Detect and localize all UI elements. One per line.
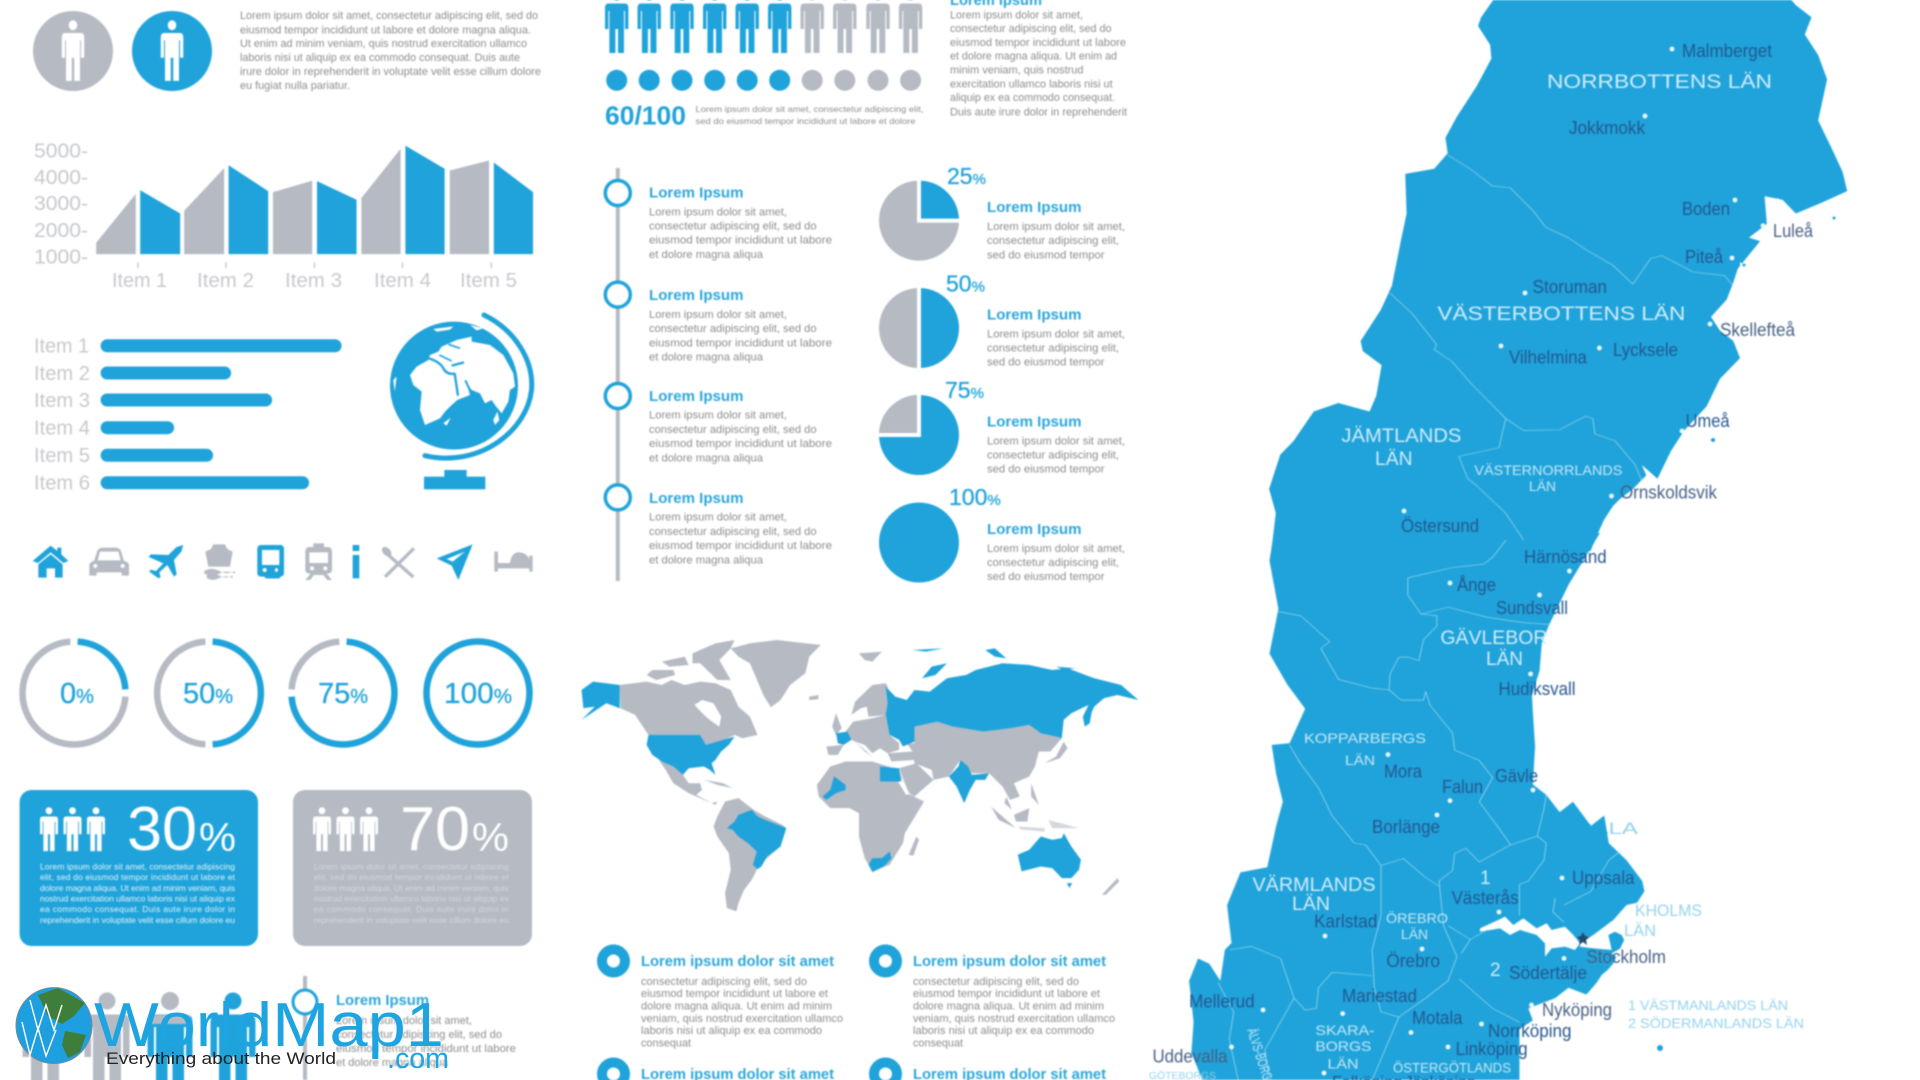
city names: Karlstad xyxy=(1314,912,1377,932)
chart: progress ring 75%: 75% xyxy=(318,678,368,710)
timeline entry 2: consectetur adipiscing elit, sed do xyxy=(649,323,817,335)
chart: pie 100% with text: 100% xyxy=(949,484,1001,510)
legend item: second column row one: dolore magna aliqua. Ut enim ad minim xyxy=(913,1000,1104,1012)
city names: Piteå xyxy=(1685,247,1724,267)
map: Sweden: ÖREBRO xyxy=(1386,909,1448,926)
city names xyxy=(1189,41,1772,1080)
panel: 30 percent xyxy=(20,790,258,946)
chart: horizontal bars: Item 6 xyxy=(34,472,90,494)
chart: pie 50% with text: Lorem Ipsum xyxy=(987,306,1082,324)
county labels: LÄN xyxy=(1375,449,1412,470)
text block: top right column: consectetur adipiscing elit, sed do xyxy=(950,23,1112,35)
timeline: bottom-left entry xyxy=(293,976,516,1080)
legend item: second column row two xyxy=(874,1062,1106,1080)
county labels: VÄSTERBOTTENS LÄN xyxy=(1437,304,1685,325)
city names crossing the coast: Ornskoldsvik xyxy=(1620,482,1718,502)
city markers xyxy=(1229,47,1765,1075)
watermark tagline: Everything about the World xyxy=(106,1050,336,1068)
text block: intro paragraph: Ut enim ad minim veniam, quis nostrud exercitation ullamco xyxy=(240,38,527,50)
chart: progress ring 100%: 100% xyxy=(444,678,512,710)
pictogram: ten people, six highlighted xyxy=(605,0,922,91)
chart: horizontal bars: Item 5 xyxy=(34,445,90,467)
map: Sweden xyxy=(1149,0,1847,1080)
chart: progress ring 0% xyxy=(23,642,125,744)
chart: pie 25% with text: sed do eiusmod tempor xyxy=(987,250,1105,262)
icon: bus xyxy=(257,545,282,578)
legend item: first column row one: consequat xyxy=(641,1038,691,1050)
stat: 60/100: 60/100 xyxy=(605,100,686,130)
timeline entry 3: Lorem Ipsum xyxy=(649,388,744,405)
city names: Borlänge xyxy=(1372,817,1440,837)
timeline entry 1: consectetur adipiscing elit, sed do xyxy=(649,220,817,232)
watermark domain: .com xyxy=(387,1043,449,1075)
chart y axis labels: 4000- xyxy=(34,167,88,189)
map legend: 1 VÄSTMANLANDS LÄN xyxy=(1628,997,1788,1013)
county labels: 2 xyxy=(1490,960,1501,981)
chart y axis labels xyxy=(34,140,88,268)
county labels: LÄN xyxy=(1486,649,1523,670)
chart: horizontal bars: Item 4 xyxy=(34,418,90,440)
chart x axis labels xyxy=(112,270,517,292)
city names: Härnösand xyxy=(1524,547,1607,567)
chart: pie 75% with text: 75% xyxy=(945,377,984,403)
map: world xyxy=(581,640,1138,911)
panel text: reprehenderit in voluptate velit esse cillum dolore eu xyxy=(314,915,509,925)
city names: Mariestad xyxy=(1342,986,1417,1006)
chart: pie 25% with text: Lorem Ipsum xyxy=(987,199,1082,216)
county labels: GÄVLEBOR xyxy=(1440,628,1547,649)
chart: pie 100% with text: consectetur adipiscing elit, xyxy=(987,557,1119,569)
legend item: second column row one: laboris nisi ut aliquip ex ea commodo xyxy=(913,1025,1094,1037)
icon: blue person badge xyxy=(132,11,212,91)
chart: progress ring 50%: 50% xyxy=(183,678,233,710)
chart: horizontal bars: Item 2 xyxy=(34,363,90,385)
chart: pie 100% with text: sed do eiusmod tempor xyxy=(987,571,1105,583)
panel: 70 percent xyxy=(293,790,532,946)
icon: house xyxy=(33,546,68,578)
panel text: elit, sed do eiusmod tempor incididunt ut labore et xyxy=(314,872,509,882)
city names: Jokkmokk xyxy=(1569,118,1646,138)
legend item: second column row one: eiusmod tempor incididunt ut labore et xyxy=(913,988,1100,1000)
panel text: Lorem ipsum dolor sit amet, consectetur adipiscing xyxy=(314,862,509,872)
chart x axis labels: Item 3 xyxy=(285,270,342,292)
legend item: second column row one: consequat xyxy=(913,1038,963,1050)
city names: Södertälje xyxy=(1509,963,1587,983)
legend item: second column row one: veniam, quis nostrud exercitation ullamco xyxy=(913,1013,1115,1025)
city names: Linköping xyxy=(1456,1039,1528,1059)
map: Sweden: SKARA- xyxy=(1315,1022,1375,1038)
city names crossing the coast: Luleå xyxy=(1773,221,1814,241)
icon: airplane xyxy=(149,545,183,578)
timeline entry 1: et dolore magna aliqua xyxy=(649,249,764,261)
timeline entry 4: eiusmod tempor incididunt ut labore xyxy=(649,540,832,552)
pictogram: bottom-left people xyxy=(22,992,256,1080)
timeline: four entries xyxy=(605,168,832,581)
chart: pie 25% with text: 25% xyxy=(947,163,986,189)
chart x axis labels: Item 4 xyxy=(374,270,431,292)
chart: progress ring 50% xyxy=(157,642,261,744)
text block: top right column xyxy=(950,0,1127,118)
timeline entry 1 xyxy=(605,180,832,261)
city names crossing the coast: Stockholm xyxy=(1586,947,1666,967)
timeline entry 3 xyxy=(605,384,832,464)
map landmass xyxy=(1189,0,1847,1080)
panel text: dolore magna aliqua. Ut enim ad minim veniam, quis xyxy=(40,883,235,893)
city names: Hudiksvall xyxy=(1498,679,1576,699)
chart: horizontal bars xyxy=(34,336,342,494)
panel: 70 percent: % xyxy=(472,816,509,860)
panel text: nostrud exercitation ullamco laboris nisi ut aliquip ex xyxy=(314,894,509,904)
chart bars xyxy=(96,146,533,268)
text block: top right column: eiusmod tempor incididunt ut labore xyxy=(950,37,1126,49)
text block: intro paragraph: Lorem ipsum dolor sit amet, consectetur adipiscing elit, sed do xyxy=(240,10,538,22)
watermark name: WorldMap1 xyxy=(94,991,444,1060)
timeline entry 4 xyxy=(605,485,832,566)
city names crossing the coast: Uddevalla xyxy=(1152,1047,1228,1067)
text block: top right column: Duis aute irure dolor in reprehenderit xyxy=(950,106,1127,118)
timeline entry 4: Lorem Ipsum xyxy=(649,490,744,507)
chart y axis labels: 1000- xyxy=(34,246,88,268)
timeline: bottom-left entry: et dolore magna aliqua xyxy=(336,1057,449,1069)
map: Sweden: LÄN xyxy=(1401,926,1428,942)
timeline entry 1: eiusmod tempor incididunt ut labore xyxy=(649,235,832,247)
text block: intro paragraph: eiusmod tempor incididunt ut labore et dolore magna aliqua. xyxy=(240,24,531,36)
chart: pie 100% with text: Lorem ipsum dolor sit amet, xyxy=(987,543,1125,555)
icon: cutlery xyxy=(381,546,414,577)
chart: horizontal bars: Item 3 xyxy=(34,390,90,412)
chart: pie 75% with text: Lorem Ipsum xyxy=(987,414,1082,430)
county labels: NORRBOTTENS LÄN xyxy=(1547,72,1772,93)
timeline entry 3: eiusmod tempor incididunt ut labore xyxy=(649,438,832,450)
map: Sweden: LÄN xyxy=(1529,478,1556,494)
panel text: ea commodo consequat. Duis aute irure dolor in xyxy=(40,904,235,914)
text block: top right column: Lorem ipsum dolor sit amet, xyxy=(950,10,1083,22)
city names: Ånge xyxy=(1457,575,1496,595)
timeline entry 4: consectetur adipiscing elit, sed do xyxy=(649,526,817,538)
panel text xyxy=(40,862,236,925)
map: Sweden: LÄN xyxy=(1345,752,1375,768)
chart: pie 50% with text: 50% xyxy=(946,270,985,296)
chart: horizontal bars: Item 1 xyxy=(34,336,89,358)
timeline entry 4: Lorem ipsum dolor sit amet, xyxy=(649,512,787,524)
panel text: ea commodo consequat. Duis aute irure dolor in xyxy=(314,904,509,914)
legend item: second column row one: consectetur adipiscing elit, sed do xyxy=(913,976,1079,988)
city names: Västerås xyxy=(1452,888,1519,908)
text block: top right column: et dolore magna aliqua. Ut enim ad xyxy=(950,50,1117,62)
text block: top right column: aliquip ex ea commodo consequat. xyxy=(950,92,1115,104)
icon: bus right side xyxy=(268,545,284,578)
icon: globe on stand xyxy=(390,315,532,489)
city names: Boden xyxy=(1682,199,1730,219)
legend item: first column row one: dolore magna aliqua. Ut enim ad minim xyxy=(641,1000,832,1012)
icon: gray person badge xyxy=(33,11,113,91)
timeline entry 1: Lorem Ipsum xyxy=(649,184,744,202)
city names crossing the coast: Skellefteå xyxy=(1720,320,1796,340)
city names: Umeå xyxy=(1686,411,1731,431)
panel text: Lorem ipsum dolor sit amet, consectetur adipiscing xyxy=(40,862,235,872)
city names: Motala xyxy=(1412,1008,1463,1028)
legend item: first column row one: consectetur adipiscing elit, sed do xyxy=(641,976,807,988)
legend item: first column row one xyxy=(602,950,843,1050)
chart y axis labels: 5000- xyxy=(34,140,88,162)
city names: Örebro xyxy=(1386,951,1440,971)
city names: Sundsvall xyxy=(1496,598,1568,618)
chart: pie 25% with text xyxy=(879,163,1125,262)
map: Sweden: VÄSTERNORRLANDS xyxy=(1474,462,1622,478)
chart: pie 25% with text: consectetur adipiscing elit, xyxy=(987,235,1119,247)
panel text: dolore magna aliqua. Ut enim ad minim veniam, quis xyxy=(314,883,509,893)
icon: train xyxy=(305,543,332,580)
text block: stat caption: sed do eiusmod tempor incididunt ut labore et dolore xyxy=(696,116,916,126)
panel text: reprehenderit in voluptate velit esse cillum dolore eu xyxy=(40,915,235,925)
county borders, south xyxy=(1218,540,1622,1080)
chart x axis labels: Item 1 xyxy=(112,270,167,292)
chart y axis labels: 2000- xyxy=(34,220,88,242)
chart: pie 75% with text: consectetur adipiscing elit, xyxy=(987,450,1119,462)
city names: Norrköping xyxy=(1488,1021,1572,1041)
panel: 70 percent: 70 xyxy=(400,795,470,864)
legend item: first column row two xyxy=(602,1062,834,1080)
watermark: WorldMap1 logo xyxy=(16,988,449,1075)
map: Sweden: KOPPARBERGS xyxy=(1304,730,1426,746)
icon: paper plane xyxy=(437,544,473,580)
panel: 30 percent: 30 xyxy=(127,795,197,864)
icons: travel row, right half xyxy=(268,543,533,580)
chart x axis labels: Item 5 xyxy=(460,270,517,292)
county labels xyxy=(1252,72,1772,981)
city names: Gävle xyxy=(1495,766,1538,786)
city names: Mora xyxy=(1384,761,1423,781)
icon: info xyxy=(353,545,359,578)
map legend: LÄN xyxy=(1624,921,1656,940)
icon: car xyxy=(89,548,129,576)
icon: bed xyxy=(494,552,533,572)
city names: Lycksele xyxy=(1613,340,1678,360)
chart: pie 50% with text: Lorem ipsum dolor sit amet, xyxy=(987,328,1125,340)
legend item: first column row one: Lorem ipsum dolor sit amet xyxy=(641,954,834,970)
county labels: 1 xyxy=(1480,868,1491,889)
timeline entry 4: et dolore magna aliqua xyxy=(649,554,764,566)
text block: stat caption xyxy=(696,104,924,126)
chart: progress ring 0%: 0% xyxy=(60,678,94,710)
text block: top right column: exercitation ullamco laboris nisi ut xyxy=(950,78,1113,90)
map legend: KHOLMS xyxy=(1635,901,1702,920)
timeline entry 2: Lorem Ipsum xyxy=(649,287,744,304)
city names: Malmberget xyxy=(1682,41,1772,61)
timeline: bottom-left entry: Lorem ipsum dolor sit amet, xyxy=(336,1015,472,1027)
Lake Malaren and Stockholm inlet xyxy=(1480,893,1680,1000)
timeline entry 3: Lorem ipsum dolor sit amet, xyxy=(649,410,787,422)
county borders, north xyxy=(1390,155,1733,540)
chart: pie 75% with text: sed do eiusmod tempor xyxy=(987,464,1105,476)
timeline: bottom-left entry: eiusmod tempor incididunt ut labore xyxy=(336,1043,516,1055)
text block: top right column: minim veniam, quis nostrud xyxy=(950,64,1084,76)
timeline: bottom-left entry: consectetur adipiscing elit, sed do xyxy=(336,1029,502,1041)
timeline entry 3: et dolore magna aliqua xyxy=(649,452,764,464)
chart: progress ring 75% xyxy=(292,642,394,744)
county labels: JÄMTLANDS xyxy=(1341,426,1461,447)
chart x axis labels: Item 2 xyxy=(197,270,254,292)
map legend xyxy=(1149,901,1804,1080)
chart: progress ring 100% xyxy=(426,642,530,744)
city names crossing the coast: Nyköping xyxy=(1542,1000,1612,1020)
map legend: 2 SÖDERMANLANDS LÄN xyxy=(1628,1014,1804,1031)
timeline entry 2 xyxy=(605,282,832,364)
timeline entry 2: et dolore magna aliqua xyxy=(649,352,764,364)
panel text xyxy=(314,862,509,925)
city names crossing the coast xyxy=(1152,221,1814,1067)
faint Uppsala label behind the map: UPPSALA xyxy=(1527,819,1639,838)
chart: pie 100% with text: Lorem Ipsum xyxy=(987,521,1082,538)
legend item: second column row one xyxy=(874,950,1115,1050)
chart: pie 50% with text: consectetur adipiscing elit, xyxy=(987,342,1119,354)
timeline: bottom-left entry: Lorem Ipsum xyxy=(336,992,429,1009)
city names: Mellerud xyxy=(1189,992,1255,1012)
timeline entry 2: eiusmod tempor incididunt ut labore xyxy=(649,337,832,349)
county labels: LÄN xyxy=(1292,894,1330,915)
map: Sweden: LÄN xyxy=(1328,1056,1358,1072)
icons: travel row, left half xyxy=(33,544,282,580)
text block: intro paragraph: laboris nisi ut aliquip ex ea commodo consequat. Duis aute xyxy=(240,52,520,64)
chart: pie 75% with text xyxy=(878,377,1125,476)
county labels: VÄRMLANDS xyxy=(1252,875,1376,896)
chart y axis labels: 3000- xyxy=(34,193,88,215)
icon: ship xyxy=(204,544,235,580)
capital star xyxy=(1577,932,1589,945)
city names: Vilhelmina xyxy=(1509,348,1588,368)
panel: 30 percent: % xyxy=(199,816,236,860)
chart: pie 100% with text xyxy=(879,484,1125,583)
legend item: second column row one: Lorem ipsum dolor sit amet xyxy=(913,954,1106,970)
legend item: first column row one: laboris nisi ut aliquip ex ea commodo xyxy=(641,1025,822,1037)
chart: pie 25% with text: Lorem ipsum dolor sit amet, xyxy=(987,221,1125,233)
map: Sweden: BORGS xyxy=(1315,1038,1371,1054)
panel text: nostrud exercitation ullamco laboris nisi ut aliquip ex xyxy=(40,894,236,904)
chart: pie 75% with text: Lorem ipsum dolor sit amet, xyxy=(987,435,1125,447)
panel text: elit, sed do eiusmod tempor incididunt ut labore et xyxy=(40,872,236,882)
city names: Uppsala xyxy=(1572,868,1635,888)
map: Sweden: ÖSTERGÖTLANDS xyxy=(1393,1058,1511,1076)
legend item: first column row one: veniam, quis nostrud exercitation ullamco xyxy=(641,1013,843,1025)
chart: split area column chart xyxy=(34,140,533,292)
watermark globe xyxy=(16,988,92,1064)
city names: Falun xyxy=(1442,777,1483,797)
chart: pie 50% with text xyxy=(879,270,1125,369)
timeline entry 2: Lorem ipsum dolor sit amet, xyxy=(649,309,787,321)
timeline entry 1: Lorem ipsum dolor sit amet, xyxy=(649,206,787,218)
chart: pie 50% with text: sed do eiusmod tempor xyxy=(987,357,1105,369)
text block: stat caption: Lorem ipsum dolor sit amet, consectetur adipiscing elit, xyxy=(696,104,924,114)
text block: intro paragraph: irure dolor in reprehenderit in voluptate velit esse cillum dolore xyxy=(240,66,541,78)
legend item: first column row one: eiusmod tempor incididunt ut labore et xyxy=(641,988,828,1000)
city names: Storuman xyxy=(1532,277,1607,297)
timeline entry 3: consectetur adipiscing elit, sed do xyxy=(649,424,817,436)
city names: Östersund xyxy=(1401,516,1479,536)
text block: intro paragraph xyxy=(240,10,541,92)
text block: intro paragraph: eu fugiat nulla pariatur. xyxy=(240,80,350,92)
